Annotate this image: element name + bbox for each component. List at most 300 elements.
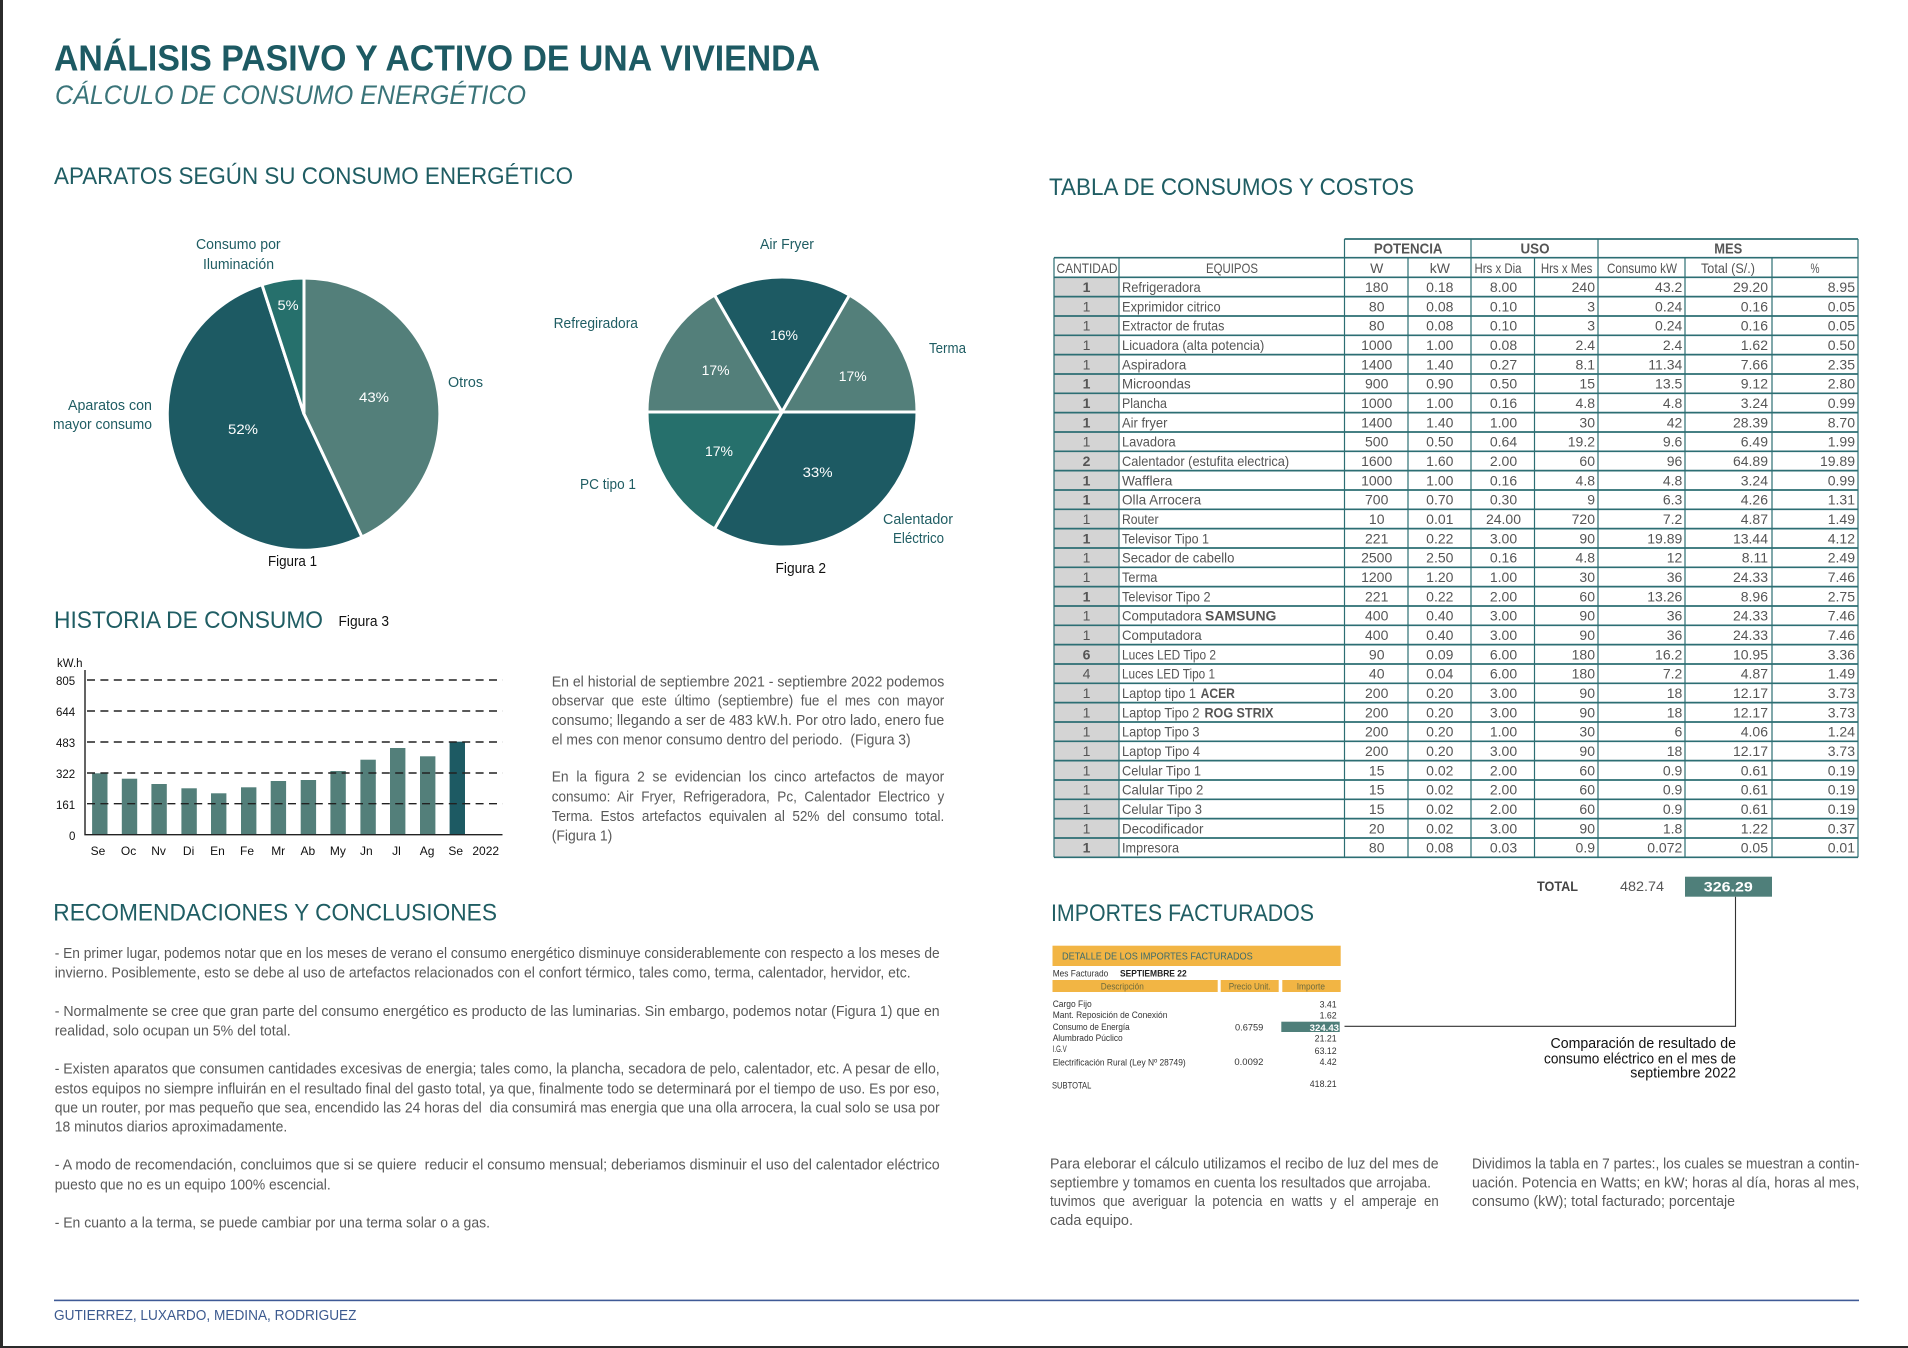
text block: recomendaciones: que un router, por mas pequeño que sea, encendido las 24 horas del dia consumirá mas energia que una olla arrocera, la cual solo se usa por — [55, 1101, 940, 1117]
text block: historial: En la figura 2 se evidencian los cinco artefactos de mayor — [552, 770, 944, 786]
table rows: 8.11 — [1742, 550, 1768, 566]
table rows: 2.35 — [1828, 356, 1855, 372]
table rows: 1 — [1083, 550, 1091, 566]
table rows: 1000 — [1361, 395, 1392, 411]
pie chart: figura 2: 17% — [702, 362, 730, 378]
table rows: Refrigeradora — [1122, 279, 1201, 295]
table rows: Televisor Tipo 2 — [1122, 588, 1211, 604]
table rows: 1000 — [1361, 472, 1392, 488]
table rows: 400 — [1365, 627, 1389, 643]
table total: TOTAL — [1537, 878, 1578, 894]
table rows: 6 — [1083, 646, 1091, 662]
text block: recomendaciones: - Existen aparatos que consumen cantidades excesivas de energia; tales como, la plancha, secadora de pelo, calentador, etc. A pesar de ello, — [55, 1061, 940, 1077]
heading: historia de consumo: HISTORIA DE CONSUMO — [54, 607, 323, 634]
invoice detail: Mant. Reposición de Conexión — [1053, 1010, 1167, 1020]
invoice detail: 4.42 — [1320, 1057, 1337, 1067]
text block: cálculo: tuvimos que averiguar la potencia en watts y el amperaje en — [1050, 1194, 1439, 1210]
table: consumos y costos — [1054, 239, 1858, 857]
table rows: 8.70 — [1828, 414, 1855, 430]
table rows: 0.19 — [1828, 801, 1855, 817]
table total: 326.29 — [1704, 878, 1753, 894]
table rows — [1083, 279, 1855, 856]
table rows: 4.8 — [1663, 472, 1683, 488]
invoice detail: Consumo de Energía — [1053, 1022, 1130, 1032]
table rows: 1 — [1083, 724, 1091, 740]
table rows: 1 — [1083, 840, 1091, 856]
table rows: 0.16 — [1490, 395, 1517, 411]
text block: historial: consumo; llegando a ser de 483 kW.h. Por otro lado, enero fue — [552, 713, 944, 729]
table rows: 3.24 — [1741, 472, 1768, 488]
pie chart: figura 2: 17% — [839, 368, 867, 384]
pie chart: figura 2 — [554, 237, 967, 577]
table rows: 0.61 — [1741, 801, 1768, 817]
table rows: Exprimidor citrico — [1122, 298, 1221, 314]
table rows: 90 — [1579, 743, 1595, 759]
table header: EQUIPOS — [1206, 260, 1258, 276]
table rows: 1 — [1083, 337, 1091, 353]
table rows: 0.01 — [1426, 511, 1454, 527]
table rows: 0.16 — [1741, 298, 1768, 314]
table rows: 18 — [1667, 743, 1683, 759]
table rows: 7.46 — [1828, 608, 1855, 624]
table rows: 3.73 — [1828, 743, 1855, 759]
bar chart: consumo mensual: Oc — [121, 844, 136, 858]
table rows: 1 — [1083, 569, 1091, 585]
table rows: 7.2 — [1663, 666, 1683, 682]
text block: cálculo: Para eleborar el cálculo utilizamos el recibo de luz del mes de — [1050, 1156, 1439, 1172]
table rows: 0.02 — [1426, 762, 1454, 778]
figure 3 label: Figura 3 — [338, 614, 389, 630]
table rows: 1600 — [1361, 453, 1392, 469]
table rows: 1 — [1083, 588, 1091, 604]
table rows: 90 — [1369, 646, 1385, 662]
pie chart: figura 1: Figura 1 — [268, 554, 317, 570]
table rows: 0.24 — [1655, 298, 1683, 314]
table rows: 0.09 — [1426, 646, 1454, 662]
table rows: 12.17 — [1733, 743, 1768, 759]
pie chart: figura 2: Calentador — [883, 512, 953, 528]
text block: partes de la tabla — [1472, 1156, 1860, 1210]
table rows: Licuadora (alta potencia) — [1122, 337, 1264, 353]
table rows: Microondas — [1122, 376, 1191, 392]
table rows: 0.20 — [1426, 743, 1454, 759]
table rows: 0.08 — [1426, 298, 1454, 314]
table rows: 0.40 — [1426, 608, 1454, 624]
invoice detail: Electrificación Rural (Ley Nº 28749) — [1053, 1058, 1186, 1068]
table rows: 9.12 — [1741, 376, 1768, 392]
table rows: 6.3 — [1663, 492, 1683, 508]
table rows: 80 — [1369, 840, 1385, 856]
table rows: Computadora — [1122, 627, 1202, 643]
table rows: Luces LED Tipo 1 — [1122, 666, 1215, 682]
table rows: 0.37 — [1828, 820, 1855, 836]
table rows: 0.99 — [1828, 395, 1855, 411]
invoice detail: 63.12 — [1315, 1046, 1337, 1056]
caption: comparación — [1544, 1036, 1736, 1082]
table rows: 1 — [1083, 704, 1091, 720]
table rows: 180 — [1365, 279, 1389, 295]
bar chart: consumo mensual: Se — [448, 844, 463, 858]
pie chart: figura 1: 52% — [228, 421, 258, 437]
table rows: 0.9 — [1663, 801, 1683, 817]
text block: partes de la tabla: uación. Potencia en Watts; en kW; horas al día, horas al mes, — [1472, 1175, 1860, 1191]
text block: cálculo: cada equipo. — [1050, 1213, 1133, 1229]
table rows: 2.00 — [1490, 762, 1517, 778]
table rows: 1.99 — [1828, 434, 1855, 450]
table rows: Laptop Tipo 2 — [1122, 704, 1200, 720]
table rows: 7.2 — [1663, 511, 1683, 527]
table rows: 80 — [1369, 318, 1385, 334]
table header: Total (S/.) — [1701, 260, 1755, 276]
table rows: 10.95 — [1733, 646, 1768, 662]
table rows: 43.2 — [1655, 279, 1683, 295]
heading: importes facturados: IMPORTES FACTURADOS — [1051, 900, 1314, 927]
table rows: 60 — [1579, 762, 1595, 778]
text block: cálculo: septiembre y tomamos en cuenta los resultados que arrojaba. — [1050, 1175, 1431, 1191]
table rows: 3.00 — [1490, 704, 1517, 720]
bar chart: consumo mensual: My — [330, 844, 346, 858]
table rows: 3.00 — [1490, 743, 1517, 759]
table rows: 1.40 — [1426, 414, 1454, 430]
table rows: 90 — [1579, 704, 1595, 720]
table rows: 30 — [1579, 724, 1595, 740]
table rows: 4.12 — [1828, 530, 1855, 546]
table rows: 9 — [1587, 492, 1595, 508]
table rows: Secador de cabello — [1122, 550, 1235, 566]
pie chart: figura 2: 17% — [705, 443, 733, 459]
table rows: 8.1 — [1576, 356, 1595, 372]
invoice detail — [1052, 946, 1341, 1091]
table rows: 3.73 — [1828, 704, 1855, 720]
table rows: 1 — [1083, 395, 1091, 411]
table rows: Impresora — [1122, 840, 1179, 856]
table rows: 0.50 — [1426, 434, 1454, 450]
text block: partes de la tabla: Dividimos la tabla en 7 partes:, los cuales se muestran a contin- — [1472, 1156, 1860, 1172]
text block: historial — [552, 674, 945, 844]
table rows: 36 — [1667, 569, 1683, 585]
table rows: 90 — [1579, 685, 1595, 701]
title: ANÁLISIS PASIVO Y ACTIVO DE UNA VIVIENDA — [54, 38, 820, 78]
text block: recomendaciones: - En primer lugar, podemos notar que en los meses de verano el consumo energético disminuye considerablemente con respecto a los meses de — [55, 946, 940, 962]
table header: kW — [1430, 260, 1451, 276]
table rows: 42 — [1667, 414, 1683, 430]
table rows: 2 — [1083, 453, 1091, 469]
table rows: 2.00 — [1490, 588, 1517, 604]
table rows: ROG STRIX — [1204, 704, 1274, 720]
bar chart: consumo mensual — [56, 658, 502, 858]
table header: W — [1370, 260, 1384, 276]
table rows: 24.33 — [1733, 627, 1768, 643]
table rows: 13.26 — [1647, 588, 1683, 604]
table rows: 1 — [1083, 279, 1091, 295]
text block: historial: observar que este último (septiembre) fue el mes con mayor — [552, 694, 944, 710]
connector line: total to invoice — [1344, 897, 1736, 1026]
table rows: 0.01 — [1828, 840, 1855, 856]
table header: POTENCIA — [1374, 240, 1443, 257]
pie chart: figura 1: Aparatos con — [68, 398, 152, 414]
pie chart: figura 2: 16% — [770, 327, 798, 343]
table rows: 7.66 — [1741, 356, 1768, 372]
table rows: 500 — [1365, 434, 1389, 450]
table rows: 6.00 — [1490, 666, 1517, 682]
table rows: 1 — [1083, 530, 1091, 546]
table rows: 4.8 — [1576, 550, 1595, 566]
invoice detail: 1.62 — [1320, 1011, 1337, 1021]
table rows: 6.00 — [1490, 646, 1517, 662]
table rows: 4.26 — [1741, 492, 1768, 508]
table rows: 4.8 — [1576, 472, 1595, 488]
table rows: Plancha — [1122, 395, 1167, 411]
pie chart: figura 1: Iluminación — [203, 257, 274, 273]
table rows: 0.08 — [1490, 337, 1517, 353]
table rows: 1 — [1083, 511, 1091, 527]
invoice detail: 0.0092 — [1234, 1057, 1264, 1067]
table rows: 2.00 — [1490, 801, 1517, 817]
table rows: 2.50 — [1426, 550, 1454, 566]
table rows: 700 — [1365, 492, 1389, 508]
bar chart: consumo mensual: kW.h — [57, 658, 83, 670]
table rows: 6 — [1675, 724, 1683, 740]
table rows: 9.6 — [1663, 434, 1683, 450]
table rows: 12.17 — [1733, 704, 1768, 720]
text block: recomendaciones: - Normalmente se cree que gran parte del consumo energético es producto de las luminarias. Sin embargo, podemos notar (Figura 1) que en — [55, 1004, 940, 1020]
bar chart: consumo mensual: Nv — [151, 844, 166, 858]
invoice detail: Importe — [1297, 981, 1325, 991]
table rows: 0.08 — [1426, 318, 1454, 334]
table rows: 0.24 — [1655, 318, 1683, 334]
table rows: 1 — [1083, 762, 1091, 778]
table rows: 1 — [1083, 627, 1091, 643]
table rows: 3.00 — [1490, 820, 1517, 836]
table rows: 30 — [1579, 414, 1595, 430]
table rows: 0.18 — [1426, 279, 1454, 295]
table rows: 0.61 — [1741, 762, 1768, 778]
table rows: 0.05 — [1741, 840, 1768, 856]
invoice detail: 324.43 — [1310, 1023, 1339, 1034]
table rows: 1 — [1083, 743, 1091, 759]
table rows: 240 — [1572, 279, 1595, 295]
table rows: 1400 — [1361, 356, 1392, 372]
table rows: Laptop Tipo 3 — [1122, 724, 1200, 740]
table rows: 1 — [1083, 492, 1091, 508]
table rows: 0.40 — [1426, 627, 1454, 643]
table rows: 2.4 — [1663, 337, 1683, 353]
table rows: 24.33 — [1733, 569, 1768, 585]
text block: recomendaciones: realidad, solo ocupan un 5% del total. — [55, 1023, 291, 1039]
text block: recomendaciones: - En cuanto a la terma, se puede cambiar por una terma solar o a gas. — [55, 1215, 490, 1231]
table rows: Laptop tipo 1 — [1122, 685, 1196, 701]
bar chart: consumo mensual: Jl — [392, 844, 401, 858]
table rows: 1400 — [1361, 414, 1392, 430]
invoice detail: DETALLE DE LOS IMPORTES FACTURADOS — [1062, 950, 1253, 962]
table rows: 96 — [1667, 453, 1683, 469]
table rows: 1 — [1083, 685, 1091, 701]
pie chart: figura 2: Refregiradora — [554, 316, 639, 332]
table total: 482.74 — [1620, 878, 1664, 894]
table rows: 4 — [1083, 666, 1091, 682]
bar chart: consumo mensual: 805 — [56, 676, 75, 688]
table rows: 0.19 — [1828, 762, 1855, 778]
caption: comparación: septiembre 2022 — [1630, 1066, 1736, 1082]
table rows: 90 — [1579, 608, 1595, 624]
table rows: 3.00 — [1490, 608, 1517, 624]
table rows: 1 — [1083, 820, 1091, 836]
table rows: 36 — [1667, 627, 1683, 643]
table rows: 0.22 — [1426, 530, 1454, 546]
invoice detail: Precio Unit. — [1229, 981, 1271, 991]
invoice detail: 0.6759 — [1235, 1023, 1263, 1033]
table rows: 1.40 — [1426, 356, 1454, 372]
bar chart: consumo mensual: 161 — [56, 800, 75, 812]
table rows: 0.9 — [1663, 762, 1683, 778]
table rows: Luces LED Tipo 2 — [1122, 646, 1216, 662]
pie chart: figura 1: 5% — [278, 297, 298, 313]
text block: recomendaciones: - A modo de recomendación, concluimos que si se quiere reducir el consumo mensual; deberiamos disminuir el uso del calentador eléctrico — [55, 1157, 940, 1173]
text block: historial: consumo: Air Fryer, Refrigeradora, Pc, Calentador Electrico y — [552, 790, 945, 806]
table rows: 24.33 — [1733, 608, 1768, 624]
bar chart: consumo mensual: Fe — [240, 844, 254, 858]
table rows: Air fryer — [1122, 414, 1168, 430]
pie chart: figura 1: Consumo por — [196, 237, 281, 253]
table rows: 1.20 — [1426, 569, 1454, 585]
table rows: 15 — [1369, 762, 1385, 778]
table rows: 29.20 — [1733, 279, 1768, 295]
table rows: 0.02 — [1426, 801, 1454, 817]
text block: recomendaciones: 18 minutos diarios aproximadamente. — [55, 1119, 287, 1135]
bar chart: consumo mensual: Jn — [360, 844, 373, 858]
table rows: 15 — [1579, 376, 1595, 392]
table rows: 2.4 — [1576, 337, 1595, 353]
table rows: 1.00 — [1490, 569, 1517, 585]
table header — [1056, 240, 1820, 276]
table rows: 1.62 — [1741, 337, 1768, 353]
table rows: 18 — [1667, 704, 1683, 720]
table rows: Celular Tipo 3 — [1122, 801, 1202, 817]
table rows: 0.50 — [1828, 337, 1855, 353]
pie chart: figura 2: Air Fryer — [760, 237, 814, 253]
table rows: 4.8 — [1663, 395, 1683, 411]
bar chart: consumo mensual: 644 — [56, 707, 76, 719]
text block: historial: el mes con menor consumo dentro del periodo. (Figura 3) — [552, 732, 911, 748]
table header: CANTIDAD — [1056, 260, 1118, 276]
table rows: 13.44 — [1733, 530, 1768, 546]
table rows: 0.99 — [1828, 472, 1855, 488]
table rows: Wafflera — [1122, 472, 1173, 488]
table header: USO — [1520, 240, 1550, 257]
table rows: 3.36 — [1828, 646, 1855, 662]
table rows: 8.96 — [1741, 588, 1768, 604]
table rows: 60 — [1579, 801, 1595, 817]
table rows: Aspiradora — [1122, 356, 1186, 372]
table rows: 180 — [1572, 666, 1595, 682]
table rows: 60 — [1579, 453, 1595, 469]
table rows: 0.90 — [1426, 376, 1454, 392]
table header: Hrs x Mes — [1541, 260, 1592, 276]
bar chart: consumo mensual: 0 — [69, 831, 75, 843]
table rows: Terma — [1122, 569, 1158, 585]
invoice detail: 21.21 — [1315, 1034, 1337, 1044]
table rows: 3.00 — [1490, 530, 1517, 546]
table rows: 0.27 — [1490, 356, 1517, 372]
text block: partes de la tabla: consumo (kW); total facturado; porcentaje — [1472, 1194, 1735, 1210]
table rows: 64.89 — [1733, 453, 1768, 469]
table rows: 1 — [1083, 376, 1091, 392]
table rows: 0.20 — [1426, 724, 1454, 740]
table total — [1537, 877, 1772, 897]
table rows: 0.10 — [1490, 318, 1517, 334]
table rows: 1.31 — [1828, 492, 1855, 508]
text block: cálculo — [1050, 1156, 1439, 1229]
table rows: 1.00 — [1426, 395, 1454, 411]
table rows: 221 — [1365, 588, 1389, 604]
table rows: 8.00 — [1490, 279, 1517, 295]
table rows: 3 — [1587, 298, 1595, 314]
table rows: Extractor de frutas — [1122, 318, 1224, 334]
invoice detail: 418.21 — [1310, 1079, 1337, 1089]
table rows: 1 — [1083, 356, 1091, 372]
caption: comparación: Comparación de resultado de — [1550, 1036, 1736, 1052]
table rows: Televisor Tipo 1 — [1122, 530, 1209, 546]
table rows: 0.16 — [1490, 472, 1517, 488]
table rows: 1 — [1083, 318, 1091, 334]
table rows: 1 — [1083, 414, 1091, 430]
table rows: 12.17 — [1733, 685, 1768, 701]
footer authors: GUTIERREZ, LUXARDO, MEDINA, RODRIGUEZ — [54, 1307, 356, 1324]
table rows: 221 — [1365, 530, 1389, 546]
bar chart: consumo mensual: Ag — [420, 844, 434, 858]
invoice detail: I.G.V — [1053, 1044, 1067, 1054]
table rows: 24.00 — [1486, 511, 1521, 527]
pie chart: figura 2: Eléctrico — [893, 531, 944, 547]
table rows: 6.49 — [1741, 434, 1768, 450]
table header: Hrs x Dia — [1474, 260, 1522, 276]
table rows: 1.49 — [1828, 666, 1855, 682]
bar chart: consumo mensual: Di — [183, 844, 194, 858]
heading: recomendaciones: RECOMENDACIONES Y CONCLUSIONES — [53, 900, 497, 927]
table rows: 12 — [1667, 550, 1683, 566]
table rows: Laptop Tipo 4 — [1122, 743, 1200, 759]
table rows: 0.61 — [1741, 782, 1768, 798]
text block: historial: Terma. Estos artefactos equivalen al 52% del consumo total. — [552, 809, 944, 825]
table rows: 1.00 — [1426, 472, 1454, 488]
table rows: ACER — [1201, 685, 1235, 701]
invoice detail: Descripción — [1101, 981, 1144, 991]
table rows: 2.75 — [1828, 588, 1855, 604]
table rows: 0.64 — [1490, 434, 1517, 450]
table rows: 200 — [1365, 704, 1389, 720]
table rows: 0.02 — [1426, 782, 1454, 798]
table rows: Router — [1122, 511, 1159, 527]
table rows: 28.39 — [1733, 414, 1768, 430]
table rows: 0.02 — [1426, 820, 1454, 836]
pie chart: figura 2: Terma — [929, 341, 967, 357]
bar chart: consumo mensual: En — [210, 844, 225, 858]
pie chart: figura 2: 33% — [803, 464, 833, 480]
table rows: Lavadora — [1122, 434, 1176, 450]
table rows: 1200 — [1361, 569, 1392, 585]
table rows: 90 — [1579, 820, 1595, 836]
table rows: 3 — [1587, 318, 1595, 334]
table rows: 0.10 — [1490, 298, 1517, 314]
table rows: 4.87 — [1741, 511, 1768, 527]
bar chart: consumo mensual: 322 — [56, 769, 75, 781]
heading: aparatos: APARATOS SEGÚN SU CONSUMO ENERGÉTICO — [54, 163, 573, 190]
table rows: 720 — [1572, 511, 1595, 527]
table rows: 1 — [1083, 298, 1091, 314]
invoice detail: SUBTOTAL — [1052, 1081, 1091, 1091]
table rows: 900 — [1365, 376, 1389, 392]
table rows: 1 — [1083, 434, 1091, 450]
